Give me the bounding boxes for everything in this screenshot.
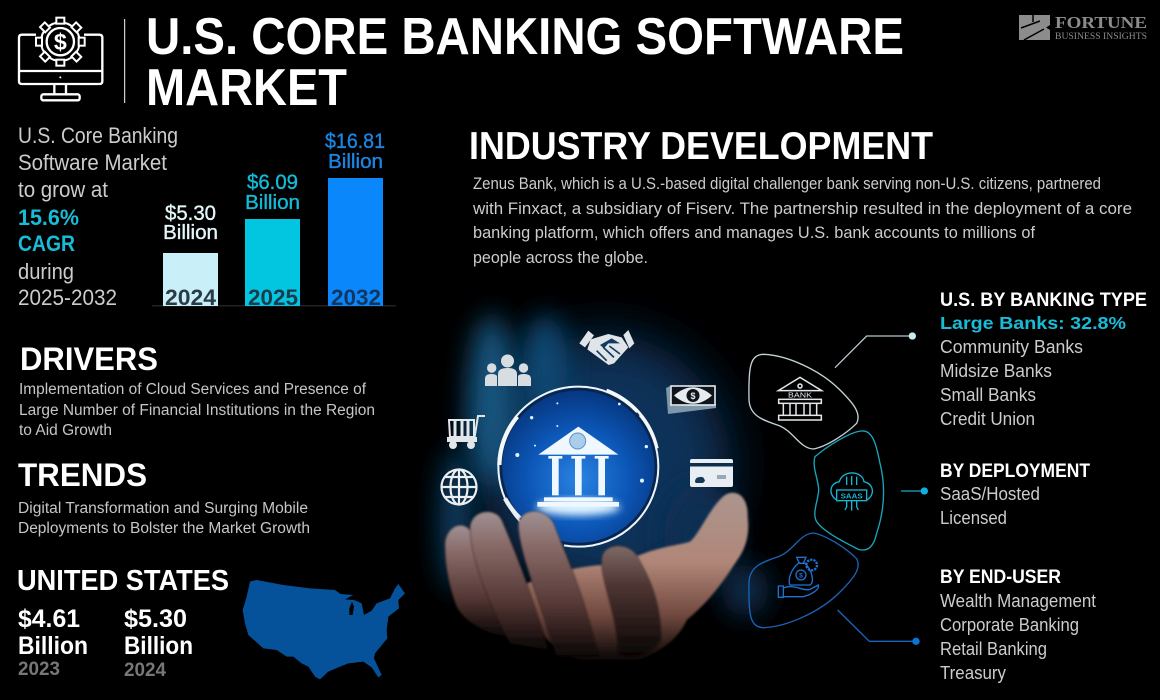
icon: globe <box>442 469 477 505</box>
text block: CAGR summary: Software Market <box>18 150 167 175</box>
list: end-user: Retail Banking <box>940 639 1047 659</box>
bar: 2024: $5.30 <box>165 202 216 225</box>
header divider <box>124 19 125 103</box>
panel: end-user blob <box>749 533 858 628</box>
text block: industry development <box>472 175 1132 267</box>
title: MARKET <box>146 59 347 117</box>
segment graphics <box>749 332 928 645</box>
stat: 2023 market size <box>18 605 88 680</box>
list: end-user: Treasury <box>940 663 1006 683</box>
stat: 2023 market size: Billion <box>18 632 88 660</box>
logo: Fortune Business Insights <box>1019 13 1147 42</box>
list: banking type <box>940 289 1147 429</box>
stat: 2024 market size: Billion <box>124 632 193 660</box>
bar: 2024 <box>163 202 218 310</box>
text block: CAGR summary <box>18 123 178 310</box>
connector: end-user <box>838 610 920 645</box>
list: end-user <box>940 566 1096 683</box>
text block: industry development: with Finxact, a subsidiary of Fiserv. The partnership resulted in the deployment of a core <box>472 200 1132 218</box>
list: banking type: Small Banks <box>940 385 1036 405</box>
list: deployment: Licensed <box>940 508 1007 528</box>
icon: cash <box>666 386 716 414</box>
text block: industry development: banking platform, which offers and manages U.S. bank accounts to millions of <box>473 224 1035 242</box>
heading: united states: UNITED STATES <box>17 565 229 597</box>
connector: deployment <box>901 487 928 495</box>
palm and thumb <box>520 493 748 667</box>
bar: 2025: 2025 <box>248 285 298 310</box>
text block: CAGR summary: 15.6% <box>18 205 79 230</box>
icon: bank: BANK <box>788 390 812 399</box>
text block: industry development: Zenus Bank, which is a U.S.-based digital challenger bank serving non-U.S. citizens, partnered <box>473 175 1101 193</box>
bar: 2032: Billion <box>328 151 383 173</box>
bar: 2025 <box>245 171 300 310</box>
list: banking type: Community Banks <box>940 337 1083 357</box>
bar: 2032 <box>325 130 385 310</box>
icon: handshake <box>579 330 634 365</box>
bar: 2025: $6.09 <box>247 171 298 194</box>
icon: bank columns <box>537 427 619 507</box>
text block: CAGR summary: CAGR <box>18 231 75 256</box>
logo: Fortune Business Insights: BUSINESS INSIGHTS <box>1055 32 1147 42</box>
text block: trends: Digital Transformation and Surging Mobile <box>18 500 308 517</box>
central hand and bank orb <box>445 387 748 667</box>
stat: 2024 market size <box>124 605 193 681</box>
text block: CAGR summary: during <box>18 259 74 284</box>
connector: banking type <box>835 332 916 368</box>
logo: Fortune Business Insights: FORTUNE <box>1055 13 1147 32</box>
icon: credit card <box>690 459 733 487</box>
bar: 2024: Billion <box>163 222 218 244</box>
stat: 2024 market size: 2024 <box>124 660 166 681</box>
list: end-user: Corporate Banking <box>940 615 1079 635</box>
bar chart <box>152 130 396 310</box>
orb <box>498 387 658 547</box>
bar: 2024: 2024 <box>165 285 217 310</box>
heading: industry development: INDUSTRY DEVELOPMENT <box>469 125 933 168</box>
list: banking type: Large Banks: 32.8% <box>940 313 1126 333</box>
icon: cash: $ <box>690 391 696 401</box>
text block: drivers: Implementation of Cloud Services and Presence of <box>19 381 367 398</box>
stat: 2023 market size: 2023 <box>18 659 60 680</box>
icon: SaaS cloud: SAAS <box>841 491 863 500</box>
icon: monitor with dollar gear: $ <box>54 29 67 55</box>
text block: drivers <box>19 381 375 439</box>
photo background: blurred blue suit <box>440 315 769 616</box>
icon: people <box>485 354 531 386</box>
list: deployment: BY DEPLOYMENT <box>940 460 1090 482</box>
panel: deployment blob <box>814 431 884 550</box>
list: banking type: U.S. BY BANKING TYPE <box>940 289 1147 311</box>
bar: 2032: $16.81 <box>325 130 385 153</box>
icon: money bag hand: $ <box>799 572 803 579</box>
panel: banking type blob <box>749 354 858 449</box>
text block: CAGR summary: to grow at <box>18 177 108 202</box>
heading: trends: TRENDS <box>18 457 147 493</box>
text block: trends <box>18 500 310 537</box>
icon: monitor with dollar gear <box>19 18 102 100</box>
map: United States <box>243 580 405 679</box>
stat: 2023 market size: $4.61 <box>18 605 80 633</box>
list: end-user: Wealth Management <box>940 591 1096 611</box>
list: deployment: SaaS/Hosted <box>940 484 1040 504</box>
bar: 2025: Billion <box>245 192 300 214</box>
icon: shopping cart <box>448 416 485 448</box>
list: end-user: BY END-USER <box>940 566 1061 588</box>
heading: drivers: DRIVERS <box>20 341 158 377</box>
text block: CAGR summary: 2025-2032 <box>18 285 117 310</box>
text block: CAGR summary: U.S. Core Banking <box>18 123 178 148</box>
text block: drivers: to Aid Growth <box>19 422 112 439</box>
text block: industry development: people across the globe. <box>473 249 648 267</box>
bar: 2032: 2032 <box>331 285 381 310</box>
list: banking type: Midsize Banks <box>940 361 1052 381</box>
fingers <box>445 511 661 657</box>
list: banking type: Credit Union <box>940 409 1035 429</box>
stat: 2024 market size: $5.30 <box>124 605 187 633</box>
list: deployment <box>940 460 1090 528</box>
text block: drivers: Large Number of Financial Institutions in the Region <box>19 402 375 419</box>
title: U.S. CORE BANKING SOFTWARE <box>146 8 904 66</box>
title <box>146 8 904 117</box>
text block: trends: Deployments to Bolster the Market Growth <box>18 520 310 537</box>
